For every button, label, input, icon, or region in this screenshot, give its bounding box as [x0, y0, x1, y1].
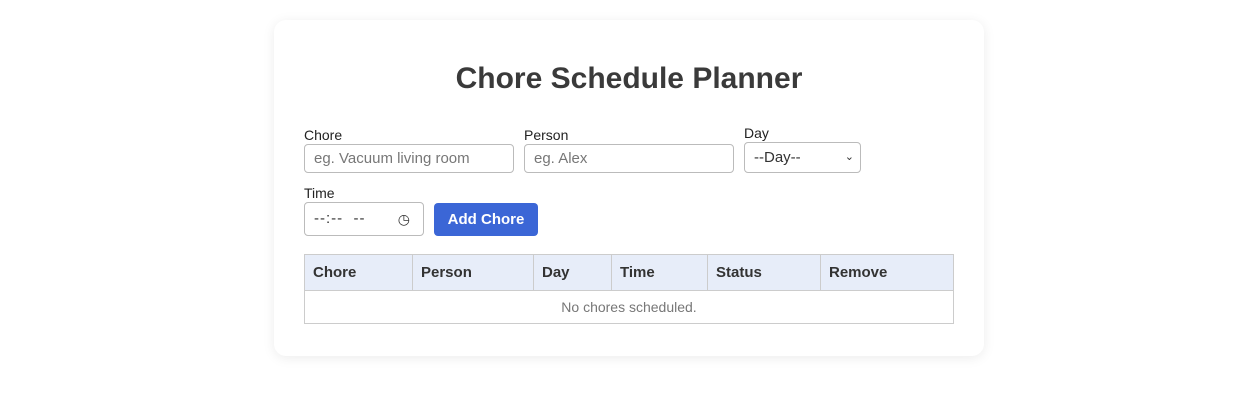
input: time: [304, 202, 424, 236]
input: time: ◷: [398, 211, 411, 227]
table: [304, 254, 954, 324]
table: Time: [620, 264, 655, 281]
label: person: Person: [524, 127, 568, 143]
panel: card: [274, 20, 984, 356]
button: add chore: Add Chore: [448, 211, 524, 228]
table: Status: [716, 264, 762, 281]
input: person: eg. Alex: [534, 150, 587, 167]
select: day: ⌄: [845, 151, 854, 163]
table: No chores scheduled.: [561, 299, 697, 315]
select: day: [744, 142, 861, 173]
title: Chore Schedule Planner: [456, 62, 802, 95]
table: Day: [542, 264, 570, 281]
input: chore: [304, 144, 514, 173]
label: day: Day: [744, 125, 769, 141]
table: Remove: [829, 264, 887, 281]
input: time: --:-- --: [314, 210, 365, 227]
label: chore: Chore: [304, 127, 342, 143]
input: chore: eg. Vacuum living room: [314, 150, 470, 167]
table: Person: [421, 264, 472, 281]
button: add chore: [434, 203, 538, 236]
select: day: --Day--: [754, 149, 801, 166]
label: time: Time: [304, 185, 335, 201]
table: Chore: [313, 264, 356, 281]
input: person: [524, 144, 734, 173]
